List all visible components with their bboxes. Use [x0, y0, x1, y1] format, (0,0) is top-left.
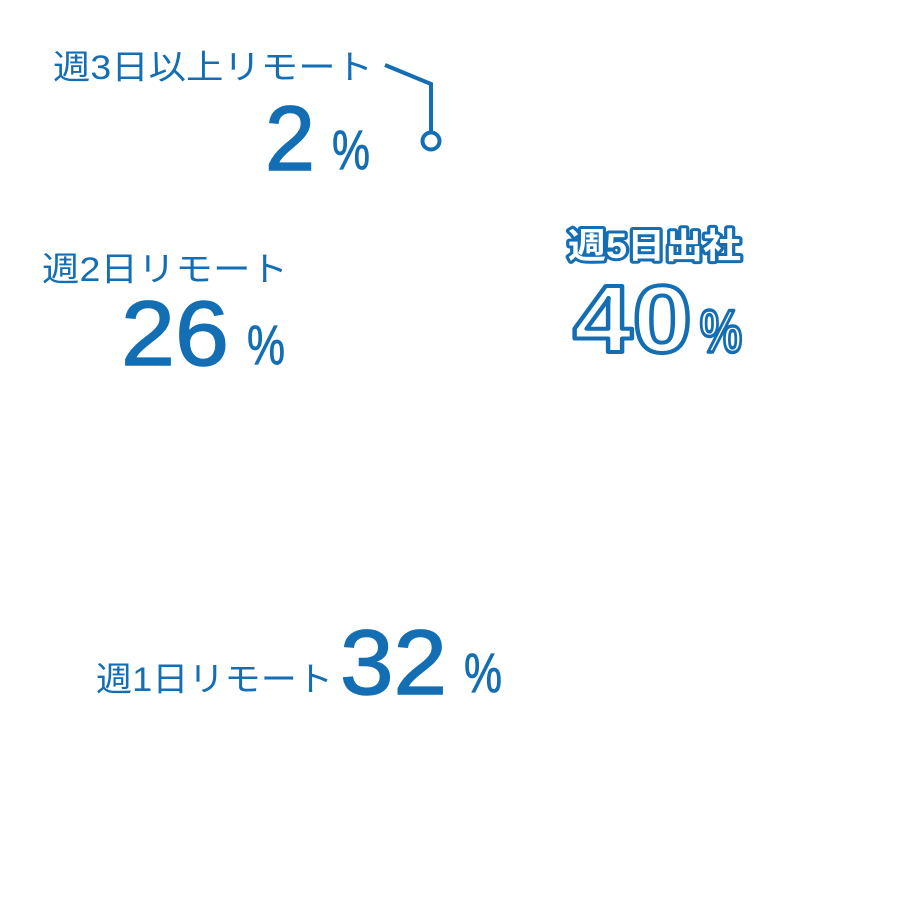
label group: 2 days remote 26% — [42, 251, 288, 385]
value: 2 percent — [265, 88, 370, 190]
value: 40 percent: 40 — [573, 266, 692, 373]
value: 26 percent: 26 — [121, 283, 229, 385]
label group: 3+ days remote 2% — [53, 49, 373, 190]
label: 1 day remote: 週1日リモート — [96, 661, 333, 699]
value: 32 percent: % — [464, 641, 502, 704]
value: 40 percent: % — [700, 298, 742, 365]
label: 2 days remote: 週2日リモート — [42, 251, 288, 289]
value: 26 percent — [121, 283, 285, 385]
value: 2 percent: % — [332, 118, 370, 181]
label: 3+ days remote: 週3日以上リモート — [53, 49, 373, 87]
value: 32 percent — [340, 612, 502, 714]
value: 26 percent: % — [247, 313, 285, 376]
value: 32 percent: 32 — [340, 612, 447, 714]
leader line with circle marker — [385, 65, 440, 150]
label group: 5 days in office 40% — [568, 227, 742, 373]
value: 2 percent: 2 — [265, 88, 315, 190]
value: 40 percent — [573, 266, 742, 373]
label: 5 days in office: 週5日出社 — [568, 227, 741, 266]
label group: 1 day remote 32% — [96, 612, 502, 714]
